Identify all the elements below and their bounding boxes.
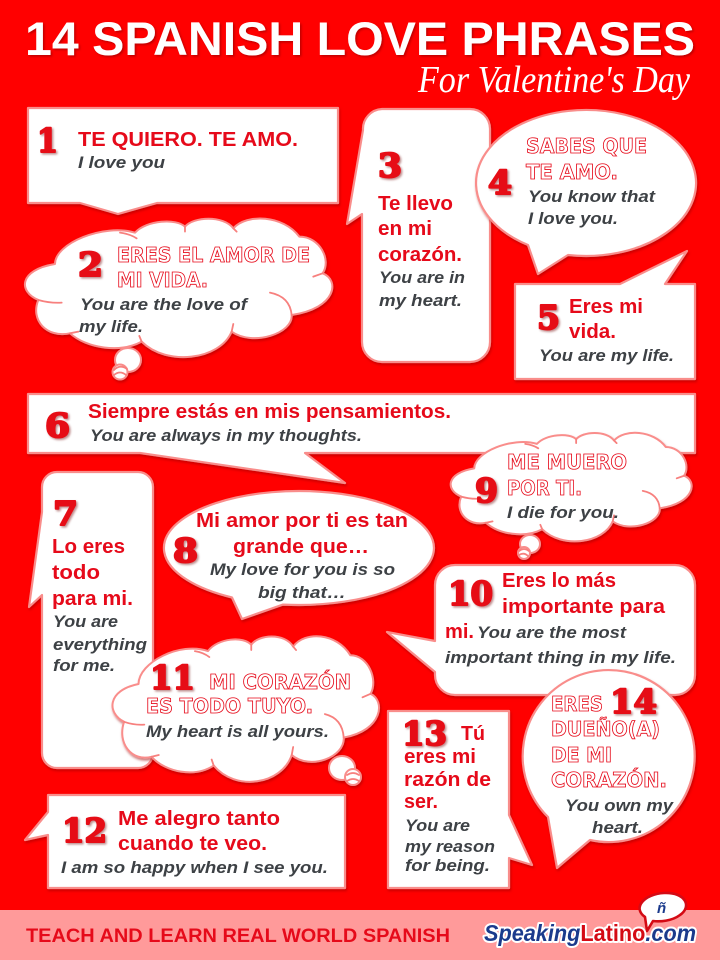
phrase 8 text: My love for you is so xyxy=(210,560,395,579)
number 2: 2 xyxy=(78,245,103,284)
phrase 4 text: I love you. xyxy=(528,209,618,228)
number 1: 1 xyxy=(37,121,58,160)
phrase 7 text xyxy=(52,536,148,675)
phrase 7 text: todo xyxy=(52,562,100,584)
subtitle: For Valentine's Day xyxy=(417,59,690,101)
phrase 8 text xyxy=(196,510,408,602)
number 8: 8 xyxy=(173,531,198,570)
icon: speech bubble xyxy=(640,893,686,931)
phrase 2 text xyxy=(79,243,310,336)
phrase 14 text: DUEÑO(A) xyxy=(551,717,660,741)
phrase 6 text: You are always in my thoughts. xyxy=(90,426,362,445)
phrase 10 text: You are the most xyxy=(477,623,627,642)
footer tagline: TEACH AND LEARN REAL WORLD SPANISH xyxy=(26,926,450,947)
phrase 3 text: en mi xyxy=(378,218,432,240)
phrase 8 text: big that… xyxy=(258,583,346,602)
panel: phrase 3 xyxy=(347,109,490,362)
panel: phrase 14 xyxy=(523,670,695,868)
number 12: 12 xyxy=(62,811,107,850)
phrase 6 text: Siempre estás en mis pensamientos. xyxy=(88,401,451,423)
phrase 3 text: my heart. xyxy=(379,291,462,310)
phrase 10 text: importante para xyxy=(502,596,666,618)
number 4: 4 xyxy=(488,163,512,202)
phrase 7 text: Lo eres xyxy=(52,536,125,558)
bubble 3 xyxy=(347,109,490,362)
panel: phrase 12 xyxy=(25,795,345,888)
panel: phrase 6 xyxy=(28,394,695,483)
phrase 8 text: grande que… xyxy=(233,536,369,558)
phrase 13 text: You are xyxy=(405,816,470,835)
thought cloud 2 xyxy=(25,218,332,380)
phrase 11 text xyxy=(146,670,351,741)
thought cloud 11 xyxy=(112,636,379,785)
bubble 12 xyxy=(25,795,345,888)
thought cloud 9 xyxy=(451,433,692,559)
number 5: 5 xyxy=(537,298,560,337)
panel: phrase 2 xyxy=(25,218,332,380)
phrase 9 text: ME MUERO xyxy=(507,450,627,474)
phrase 4 text xyxy=(526,134,656,228)
phrase 10 text xyxy=(445,570,676,667)
phrase 14 text: You own my xyxy=(565,796,675,815)
phrase 14 text: CORAZÓN. xyxy=(551,768,667,792)
phrase 1 text: TE QUIERO. TE AMO. xyxy=(78,129,298,151)
logo wordmark: SpeakingLatino.com xyxy=(484,920,696,946)
bubble 4 xyxy=(476,110,696,274)
panel: phrase 11 xyxy=(112,636,379,785)
phrase 14 text xyxy=(551,692,675,837)
panel: phrase 4 xyxy=(476,110,696,274)
phrase 12 text: I am so happy when I see you. xyxy=(61,858,328,877)
phrase 13 text: for being. xyxy=(405,856,490,875)
phrase 13 text: Tú xyxy=(461,723,485,745)
phrase 14 text: ERES xyxy=(551,692,603,716)
number 6: 6 xyxy=(45,406,70,445)
phrase 9 text: POR TI. xyxy=(507,476,582,500)
phrase 13 text xyxy=(404,723,495,875)
bubble 14 xyxy=(523,670,695,868)
phrase 3 text: Te llevo xyxy=(378,193,453,215)
logo: SpeakingLatino.com xyxy=(484,893,696,946)
bubble 1 xyxy=(28,108,338,214)
logo letter: ñ xyxy=(657,900,666,917)
phrase 4 text: SABES QUE xyxy=(526,134,647,158)
bubble 10 xyxy=(387,565,695,695)
phrase 11 text: My heart is all yours. xyxy=(146,722,329,741)
number 11: 11 xyxy=(150,658,195,697)
phrase 1 text: I love you xyxy=(78,153,166,172)
bubble 7 xyxy=(29,472,153,768)
panel: phrase 9 xyxy=(451,433,692,559)
phrase 7 text: for me. xyxy=(53,656,115,675)
phrase 12 text xyxy=(61,808,328,877)
phrase 6 text xyxy=(88,401,451,445)
panel: phrase 10 xyxy=(387,565,695,695)
phrase 4 text: You know that xyxy=(528,187,656,206)
panel: phrase 5 xyxy=(515,251,695,379)
number 10: 10 xyxy=(448,574,493,613)
panel: phrase 1 xyxy=(28,108,338,214)
phrase 11 text: MI CORAZÓN xyxy=(209,670,351,694)
phrase 3 text: corazón. xyxy=(378,244,462,266)
phrase 9 text xyxy=(507,450,627,522)
bubble 6 xyxy=(28,394,695,483)
phrase 13 text: ser. xyxy=(404,791,438,813)
phrase 3 text xyxy=(378,193,465,310)
phrase 2 text: You are the love of xyxy=(80,295,250,314)
phrase 1 text xyxy=(78,129,298,172)
number 9: 9 xyxy=(475,471,498,510)
phrase 7 text: everything xyxy=(53,635,148,654)
panel: phrase 8 xyxy=(164,491,434,619)
title: 14 SPANISH LOVE PHRASES xyxy=(25,12,695,65)
phrase 13 text: my reason xyxy=(405,837,495,856)
phrase 14 text: DE MI xyxy=(551,743,612,767)
phrase 7 text: para mi. xyxy=(52,588,133,610)
bubble 13 xyxy=(388,711,532,888)
phrase 5 text: Eres mi xyxy=(569,296,643,318)
phrase 10 text: important thing in my life. xyxy=(445,648,676,667)
number 14: 14 xyxy=(610,682,657,721)
phrase 13 text: eres mi xyxy=(404,746,476,768)
phrase 10 text: Eres lo más xyxy=(502,570,616,592)
phrase 7 text: You are xyxy=(53,612,118,631)
panel: phrase 7 xyxy=(29,472,153,768)
phrase 2 text: ERES EL AMOR DE xyxy=(117,243,310,267)
number 13: 13 xyxy=(402,714,447,753)
bubble 5 xyxy=(515,251,695,379)
phrase 3 text: You are in xyxy=(379,268,465,287)
phrase 10 text: mi. xyxy=(445,621,474,643)
phrase 9 text: I die for you. xyxy=(507,503,619,522)
phrase 13 text: razón de xyxy=(404,769,491,791)
phrase 12 text: cuando te veo. xyxy=(118,833,267,855)
panel: phrase 13 xyxy=(388,711,532,888)
phrase 12 text: Me alegro tanto xyxy=(118,808,280,830)
phrase 8 text: Mi amor por ti es tan xyxy=(196,510,408,532)
footer band xyxy=(0,910,720,960)
number 3: 3 xyxy=(378,146,402,185)
bubble 8 xyxy=(164,491,434,619)
number 7: 7 xyxy=(53,494,78,533)
phrase 2 text: my life. xyxy=(79,317,143,336)
phrase 5 text: You are my life. xyxy=(539,346,674,365)
phrase 5 text xyxy=(539,296,674,365)
phrase 2 text: MI VIDA. xyxy=(117,268,208,292)
phrase 4 text: TE AMO. xyxy=(526,160,618,184)
phrase 14 text: heart. xyxy=(592,818,643,837)
phrase 11 text: ES TODO TUYO. xyxy=(146,694,313,718)
phrase 5 text: vida. xyxy=(569,321,616,343)
